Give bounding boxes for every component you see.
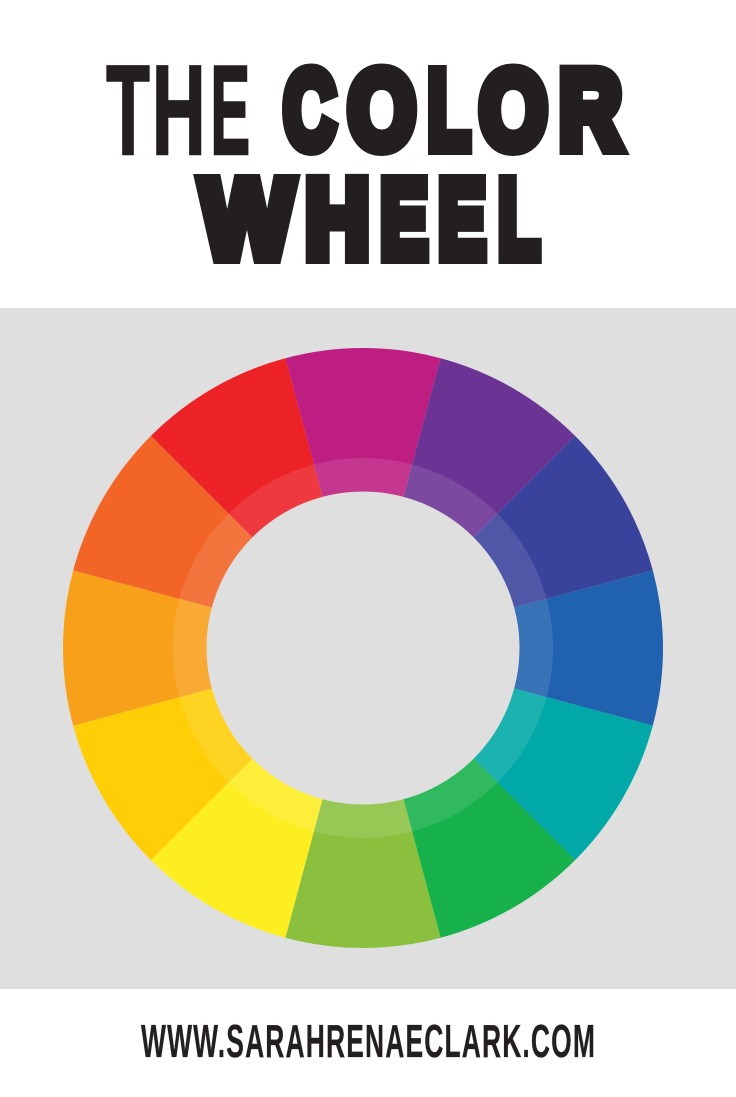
title word: COLOR: C [284, 49, 335, 172]
segment: red [151, 358, 363, 648]
segment: teal [363, 648, 653, 860]
title word: WHEEL: E [380, 158, 428, 281]
segment: yellow-orange [73, 648, 363, 860]
title word: COLOR: O [480, 49, 547, 172]
segment: indigo [363, 436, 653, 648]
title word: THE [106, 39, 250, 181]
segment: purple [363, 358, 575, 648]
title word: WHEEL: L [498, 158, 540, 281]
segment: yellow-green [285, 648, 441, 948]
title word: COLOR: L [428, 49, 470, 172]
title word: WHEEL [201, 158, 540, 281]
segment: orange [63, 570, 363, 726]
title word: WHEEL: E [438, 158, 486, 281]
segment: blue [363, 570, 663, 726]
wheel center [206, 492, 520, 804]
title word: WHEEL: H [305, 158, 369, 281]
segment: red-orange [73, 436, 363, 648]
title word: COLOR: O [348, 49, 415, 172]
translucent inner ring [190, 475, 536, 821]
segment: yellow [151, 648, 363, 938]
title word: WHEEL: W [201, 158, 293, 281]
segment: green [363, 648, 575, 938]
title word: THE: T [106, 39, 150, 181]
title word: COLOR: R [559, 49, 622, 172]
title: E [210, 39, 250, 181]
color wheel [63, 348, 663, 948]
title word: COLOR [284, 49, 622, 172]
title [106, 39, 622, 281]
segment: magenta [285, 348, 441, 648]
panel: grey background [0, 308, 736, 989]
title word: THE: H [152, 39, 206, 181]
